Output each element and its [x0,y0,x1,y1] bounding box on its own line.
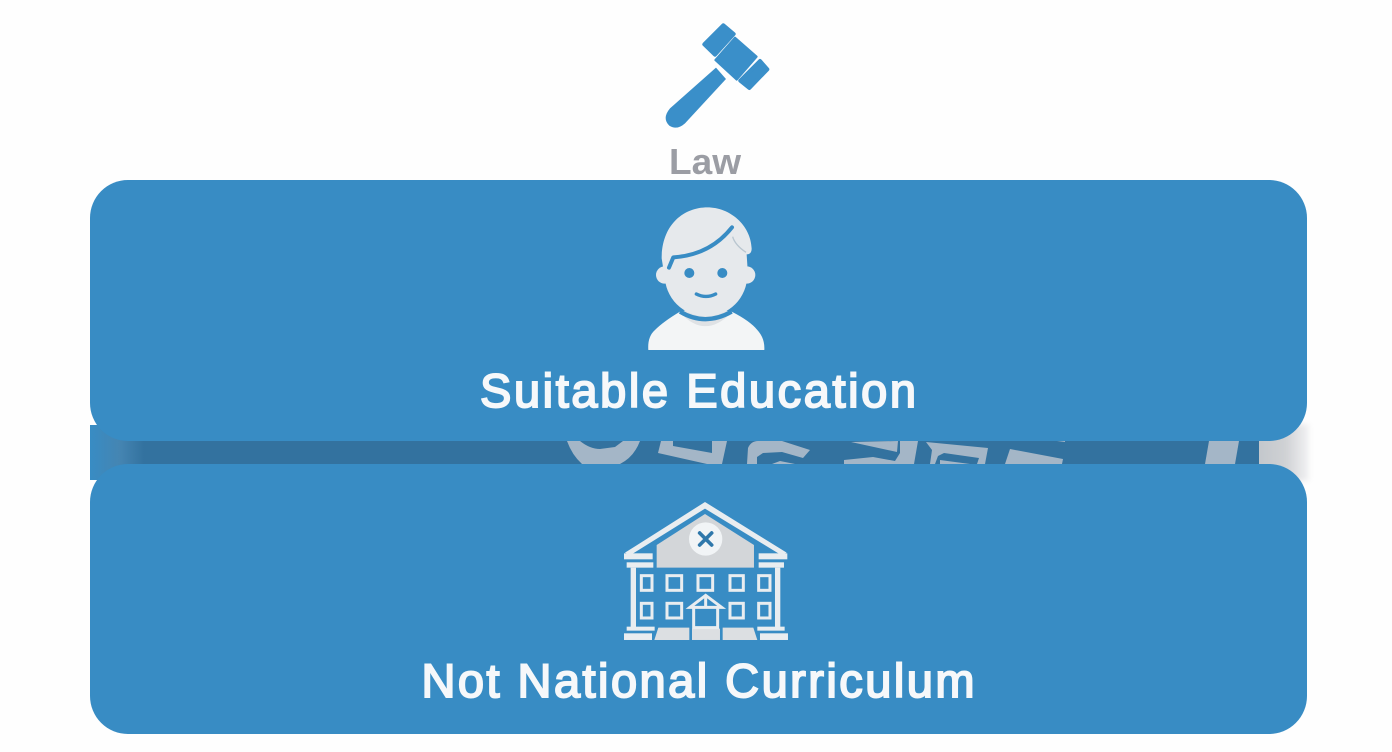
label: Law: Law [669,141,742,182]
cut-off lettering in the strip [567,441,1239,464]
icon: child [648,207,764,350]
icon: gavel [666,25,767,128]
strip band [143,441,1259,464]
panel: Suitable Education [90,180,1307,441]
icon: school building [624,502,788,640]
left strip fade [90,425,144,480]
heading: Suitable Education: Suitable Education [480,364,916,417]
panel: Not National Curriculum [90,464,1307,734]
heading: Not National Curriculum: Not National Curriculum [422,654,974,707]
dark strip behind panels [90,424,1309,481]
right shadow fade [1250,424,1309,481]
